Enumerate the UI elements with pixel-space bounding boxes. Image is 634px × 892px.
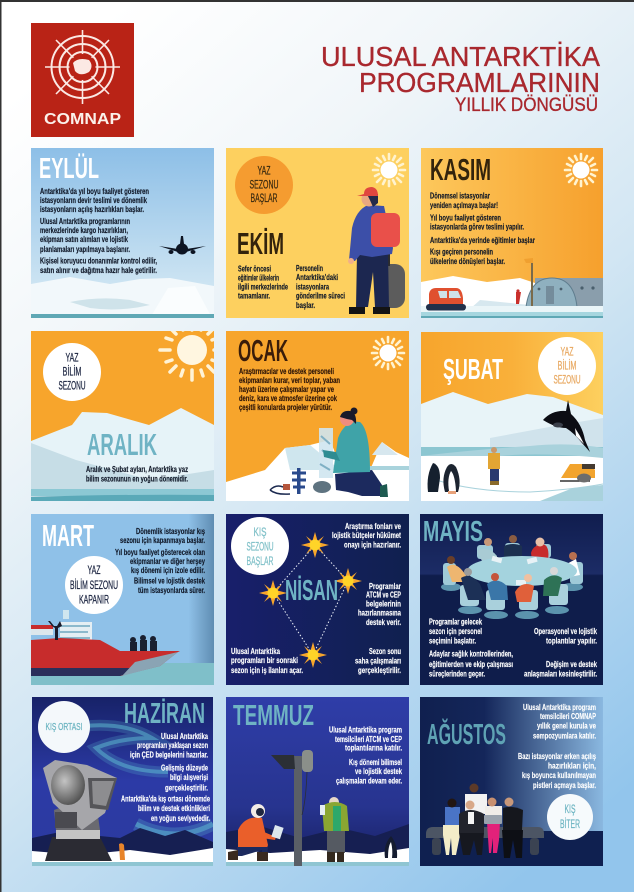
illustration: instrument pole [271,750,313,866]
text: bottom right: saha çalışmaları [355,656,401,666]
text: left: seçimini başlatır. [429,636,476,646]
text block: ekipmanları kurar, veri toplar, yaban [239,376,340,385]
text: left: eğitimlerden ve ekip çalışması [429,660,513,669]
text block: temsilcileri ATCM ve CEP [335,735,402,744]
text: right: anlaşmaları kesinleştirilir. [524,670,597,678]
text: right column: istasyonlara [296,282,329,292]
text block: toplantılarına katılır. [345,744,402,752]
illustration: meeting table [441,535,583,619]
panel: Temmuz [226,697,409,866]
text block [121,732,210,823]
aurora [84,725,213,834]
text: left [231,647,303,675]
text: left column: eğitimler ülkelerin [238,274,279,282]
text block: Kış dönemi bilimsel [349,758,402,767]
text: middle right: Programlar [369,582,401,591]
panel: Şubat [421,332,603,501]
ice landscape [421,392,603,501]
text block: Ulusal Antarktika programlarının [40,217,130,226]
text: middle right: destek verir. [366,618,401,627]
badge: yaz sezonu başlar [235,156,293,214]
text: middle right: belgelerinin [366,600,401,608]
text: left column: ilgili merkezlerinde [238,282,288,292]
text block: istasyonların açılış hazırlıkları başlar. [40,205,144,214]
badge: kış sezonu başlar: KIŞ [254,527,267,539]
badge: yaz bilim sezonu: BİLİM [558,360,576,372]
badge: kış biter [547,794,593,840]
title [321,41,600,116]
heading: ARALIK [87,427,157,462]
text block: Ulusal Antarktika [161,732,208,741]
text block: çeşitli konularda projeler yürütür. [239,403,332,412]
panel: Mart [31,514,214,685]
text block [430,192,535,266]
logo wordmark: COMNAP [44,111,121,128]
text: right column: Personelin [296,264,323,273]
heading: EYLÜL [39,152,99,185]
badge: yaz bilim sezonu kapanır: YAZ [88,565,100,577]
text block: Yıl boyu faaliyet gösterecek olan [115,548,205,557]
text: bottom: hazırlıkları için, [548,762,596,770]
text block [239,367,340,412]
heading: NİSAN [285,575,338,607]
text: left: Ulusal Antarktika [231,647,280,656]
text: left [429,618,513,678]
badge: kış ortası: KIŞ ORTASI [46,721,82,733]
text block: istasyonlarda görev teslimi yapılır. [430,222,524,232]
text: right column [296,264,345,310]
panel: Haziran [32,697,213,866]
text block: Araştırmacılar ve destek personeli [239,367,334,376]
heading: KASIM [430,152,491,187]
text: right column: başlar. [296,301,315,310]
badge: yaz sezonu başlar: YAZ [258,166,270,178]
text: left: sezon için iş ilanları açar. [231,666,303,675]
illustration: snow, base and vehicle [421,258,603,318]
heading: MART [42,518,94,553]
badge: kış sezonu başlar: BAŞLAR [246,556,274,568]
text: left: süreçlerinden geçer. [429,670,485,678]
illustration: person in orange [119,843,125,860]
illustration: people on bench [426,784,544,858]
snow hills [31,277,214,318]
badge: yaz sezonu başlar: BAŞLAR [250,193,278,205]
text block: çalışmaları devam eder. [336,776,402,786]
logo: COMNAP [31,23,134,137]
text: bottom: kış boyunca kullanılmayan [522,771,596,780]
icon: Antarctica target [45,30,120,104]
illustration: orca [543,400,590,452]
illustration: scientist in green [320,797,349,862]
illustration: penguin [385,836,397,858]
title: ULUSAL ANTARKTİKA [321,41,600,72]
badge: yaz bilim sezonu [538,337,596,395]
text: bottom right: Sezon sonu [369,647,401,656]
badge: kış sezonu başlar: SEZONU [246,542,274,554]
text block: istasyonların devir teslimi ve dönemlik [40,196,147,205]
text block: Antarktika'da yıl boyu faaliyet gösteren [40,187,149,196]
text block: Antarktika'da kış ortası dönemde [121,794,210,804]
text block: Kışı geçiren personelin [430,248,493,256]
text block: ekipman satın alımları ve lojistik [40,235,128,244]
text block: Antarktika'da yerinde eğitimler başlar [430,236,535,245]
panel: Mayıs [420,514,603,685]
text: left: sezon için personel [429,627,482,636]
text block: Aralık ve Şubat ayları, Antarktika yaz [86,465,188,474]
heading: ŞUBAT [443,354,503,386]
text: left column [238,264,288,300]
badge: kış biter: BİTER [560,818,580,831]
text: right column: Antarktika'daki [296,273,338,282]
text: top right [332,522,401,550]
badge: yaz bilim sezonu: BİLİM [62,366,82,378]
badge: kış sezonu başlar [231,517,289,575]
text block [40,187,157,275]
heading: AĞUSTOS [427,717,506,751]
mountains and snow [32,828,213,866]
text: top: temsilcileri COMNAP [540,712,596,721]
heading: OCAK [238,333,288,368]
illustration: telescope [43,760,117,861]
constellation [259,532,362,668]
text: right [524,627,597,678]
text: left: Programlar gelecek [429,618,482,626]
heading: MAYIS [423,516,483,548]
badge: kış biter: KIŞ [564,804,576,816]
text: middle right [358,582,401,627]
text: top: sempozyumlara katılır. [533,732,596,740]
text: right: Değişim ve destek [546,660,597,669]
badge: yaz bilim sezonu: YAZ [66,352,78,364]
text: middle right: ATCM ve CEP [366,590,401,600]
text block: bilim ve destek etkinlikleri [138,804,210,813]
text: bottom: Bazı istasyonlar erken açılış [518,752,596,761]
text block: merkezlerinde kargo hazırlıkları, [40,226,128,235]
text block: için ÇED belgelerini hazırlar. [130,750,208,760]
illustration: traveller with backpack [348,187,405,314]
text block: Dönemsel istasyonlar [430,192,490,200]
illustration: penguins [428,463,460,494]
text: top right: Araştırma fonları ve [345,522,401,531]
text block: yeniden açılmaya başlar! [430,201,498,210]
text block: satın alınır ve dağıtma hazır hale getirilir. [40,266,157,275]
illustration: scientist with ice core [226,408,409,501]
icon: airplane [159,236,206,254]
text: bottom right: gerçekleştirilir. [358,666,401,675]
panel: Ocak [226,331,409,501]
mountains and snow [226,824,409,866]
text block: planlamaları yapılmaya başlanır. [40,245,130,254]
title: PROGRAMLARININ [359,67,600,98]
mountains [31,408,214,501]
text block [115,527,205,595]
text: top [523,703,596,740]
text block: deniz, kara ve atmosfer üzerine çok [239,394,337,403]
text block: Yıl boyu faaliyet gösteren [430,214,501,222]
illustration: kneeling scientist in orange [228,804,284,861]
text: middle right: hazırlanmasına [358,608,401,618]
illustration: snowmobile [560,464,595,482]
badge: yaz bilim sezonu: SEZONU [554,374,580,386]
text block: kış dönemi için izole edilir. [131,566,205,575]
text block: ve lojistik destek [355,767,402,776]
text: left column: Sefer öncesi [238,264,271,274]
text block: gerçekleştirilir. [165,784,208,792]
text block: en yoğun seviyededir. [151,814,210,823]
icon: sun [158,331,214,382]
text: top: Ulusal Antarktika program [523,703,596,712]
text: left: Adaylar sağlık kontrollerinden, [429,650,513,658]
badge: yaz bilim sezonu [43,343,101,401]
text block: Bilimsel ve lojistik destek [134,576,205,586]
icon: sun [373,154,405,186]
text block: sezonu için kapanmaya başlar. [120,536,205,545]
text: right: Operasyonel ve lojistik [534,627,597,636]
illustration: ship [31,610,180,676]
panel: Aralık [31,331,214,501]
sea [31,663,214,685]
text block: tüm istasyonlarda sürer. [138,586,205,595]
text block: programları yaklaşan sezon [137,741,208,750]
badge: yaz bilim sezonu: YAZ [560,346,574,358]
badge: yaz bilim sezonu kapanır: BİLİM SEZONU [70,579,118,592]
panel: Kasım [421,148,603,318]
text block: hayatı üzerine çalışmalar yapar ve [239,385,334,394]
illustration: scientist [488,447,500,485]
panel: Ağustos [420,697,603,866]
text block: Gelişmiş düzeyde [161,764,208,772]
text: right: toplantılar yapılır. [546,636,597,646]
title: YILLIK DÖNGÜSÜ [455,95,598,116]
panel: Nisan [226,514,409,685]
text block: ekipmanlar ve diğer herşey [130,557,205,566]
icon: sun [372,337,404,369]
badge: yaz sezonu başlar: SEZONU [250,180,278,192]
text: top right: lojistik bütçeler hükümet [332,531,401,540]
text block: bilim sezonunun en yoğun dönemidir. [86,474,188,484]
text: right column: gönderilme süreci [296,292,345,300]
heading: HAZİRAN [124,698,205,730]
text block [86,465,188,484]
panel: Ekim [226,148,409,318]
text block: Ulusal Antarktika program [329,726,402,734]
text block: Dönemlik istasyonlar kış [136,527,205,536]
badge: yaz bilim sezonu: SEZONU [58,380,86,392]
text block: ülkelerine dönüşleri başlar. [430,257,505,266]
badge: yaz bilim sezonu kapanır: KAPANIR [79,594,109,606]
text: bottom right [355,647,401,675]
text: top: yıllık genel kurula ve [537,722,596,730]
text: left: programları bir sonraki [231,656,298,665]
badge: yaz bilim sezonu kapanır [65,556,123,614]
heading: TEMMUZ [233,700,314,732]
heading: EKİM [237,226,284,261]
text: bottom: pistleri açmaya başlar. [533,781,596,790]
badge: kış ortası [38,701,90,753]
icon: sun [565,154,597,186]
text block [329,726,402,786]
text block: Kişisel koruyucu donanımlar kontrol edilir, [40,256,157,266]
text block: bilgi alışverişi [170,773,208,782]
text: left column: tamamlanır. [238,292,270,300]
text: top right: onayı için hazırlanır. [344,540,401,550]
panel: Eylül [31,148,214,318]
text: bottom [518,752,596,790]
